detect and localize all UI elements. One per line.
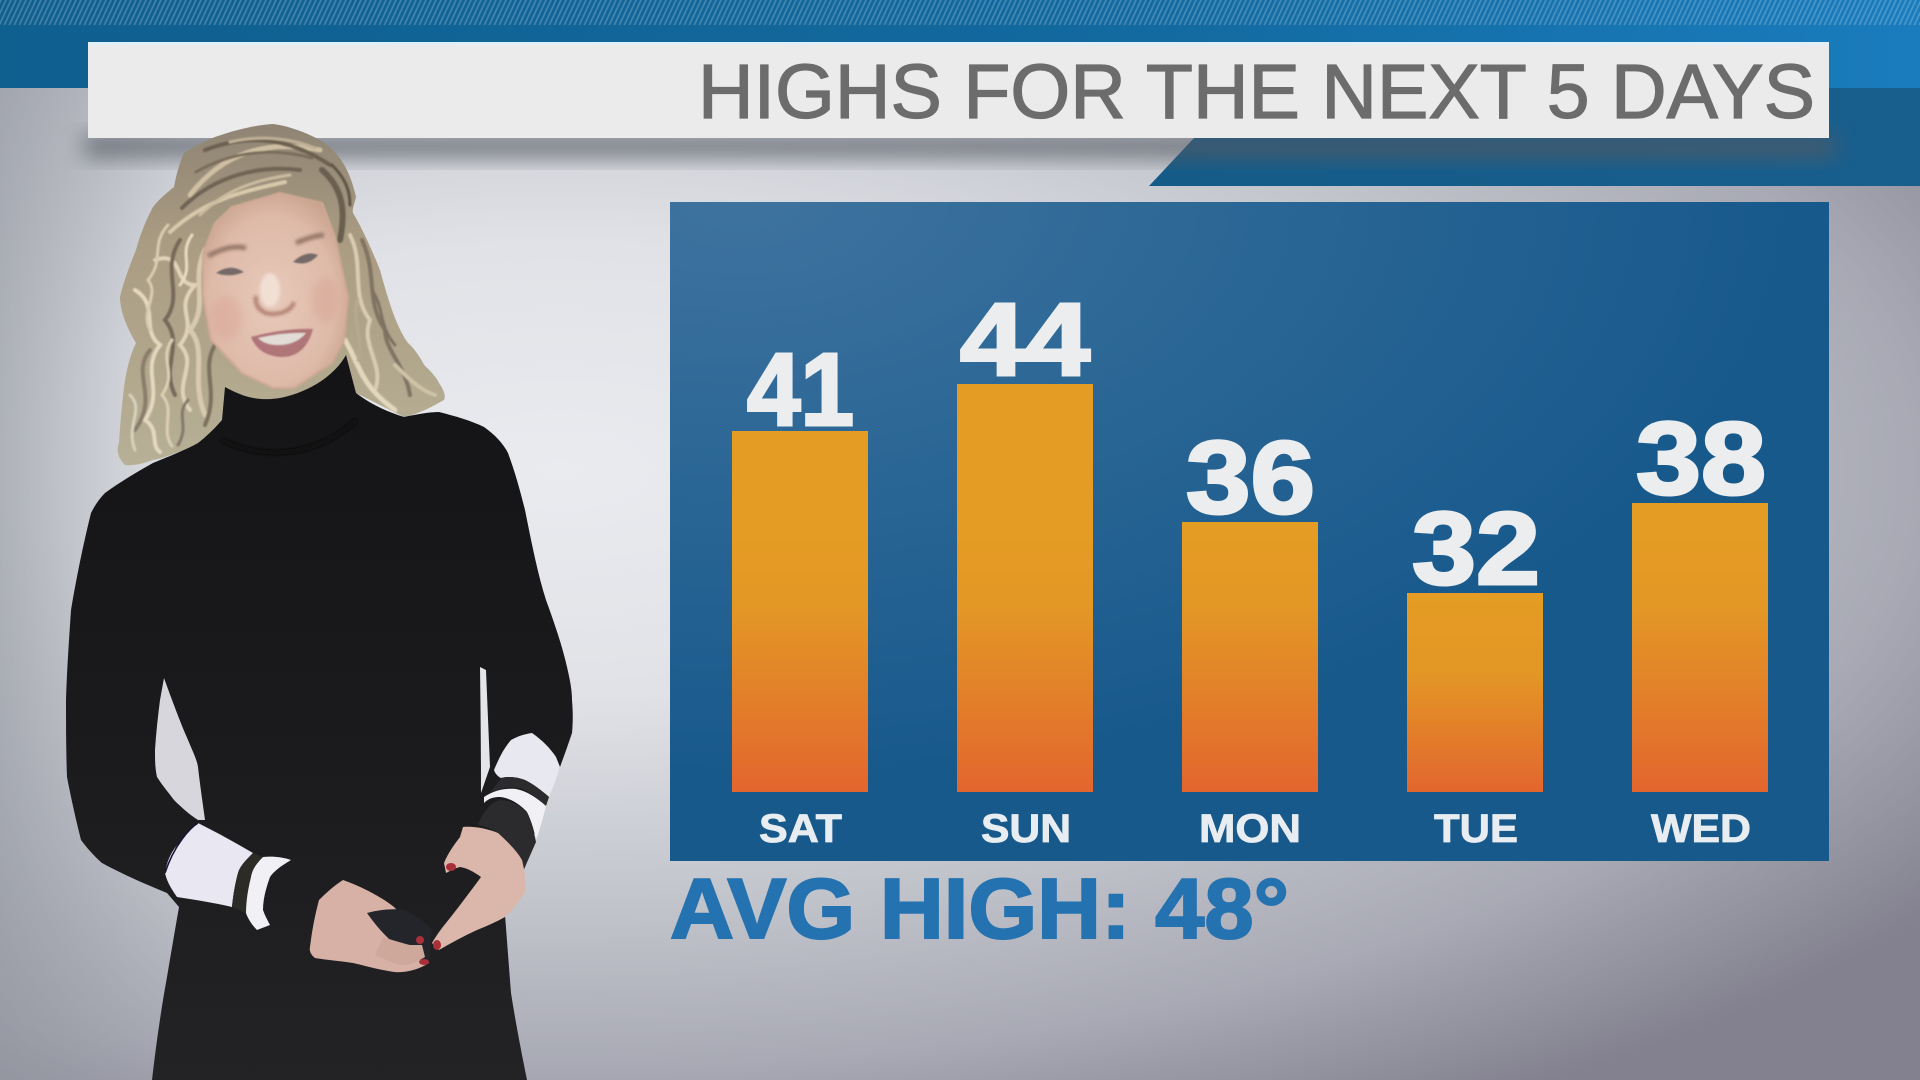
bar: Wednesday 38 bbox=[1632, 401, 1768, 851]
gap under left arm bbox=[155, 678, 205, 820]
eyebrows bbox=[208, 235, 324, 256]
bar: Tuesday 32 bbox=[1407, 491, 1543, 851]
nose bbox=[256, 296, 294, 314]
bar: Tuesday 32: TUE bbox=[1434, 807, 1518, 851]
sweater collar fold bbox=[222, 420, 356, 453]
bar: Monday 36: 36 bbox=[1186, 420, 1315, 535]
bar: Sunday 44 bbox=[957, 282, 1093, 851]
mouth bbox=[251, 329, 313, 357]
presenter hair bbox=[118, 124, 445, 465]
presenter left hand holding clicker bbox=[310, 880, 432, 972]
red nails bbox=[416, 863, 456, 965]
presenter sweater bbox=[66, 355, 573, 1080]
title bar shadow bbox=[84, 134, 1836, 158]
eyes bbox=[216, 254, 318, 275]
title bar bbox=[88, 42, 1829, 138]
bar: Wednesday 38: WED bbox=[1651, 807, 1751, 851]
bar: Saturday 41: 41 bbox=[747, 332, 854, 447]
bar: Wednesday 38: 38 bbox=[1636, 401, 1766, 516]
header dark ribbon bbox=[1149, 88, 1920, 186]
average high callout: AVG HIGH: 48° bbox=[670, 862, 1289, 957]
presenter face bbox=[203, 193, 348, 388]
bar: Monday 36: MON bbox=[1199, 807, 1301, 851]
presenter right hand bbox=[432, 827, 525, 950]
gap under right arm bbox=[480, 667, 490, 793]
bar: Saturday 41: SAT bbox=[759, 807, 842, 851]
presenter figure bbox=[66, 124, 573, 1080]
bar: Saturday 41 bbox=[732, 332, 868, 851]
header blue band bbox=[0, 0, 1920, 88]
bar: Monday 36 bbox=[1182, 420, 1318, 851]
right cuff bbox=[478, 733, 560, 867]
title text: HIGHS FOR THE NEXT 5 DAYS bbox=[698, 49, 1815, 135]
bar: Tuesday 32: 32 bbox=[1412, 491, 1540, 606]
bar: Sunday 44: SUN bbox=[981, 807, 1071, 851]
bar: Sunday 44: 44 bbox=[960, 282, 1090, 397]
clicker bbox=[367, 909, 432, 960]
cheek blush bbox=[210, 296, 242, 340]
panel: bar chart of daily highs bbox=[670, 202, 1829, 861]
left cuff bbox=[165, 823, 291, 930]
